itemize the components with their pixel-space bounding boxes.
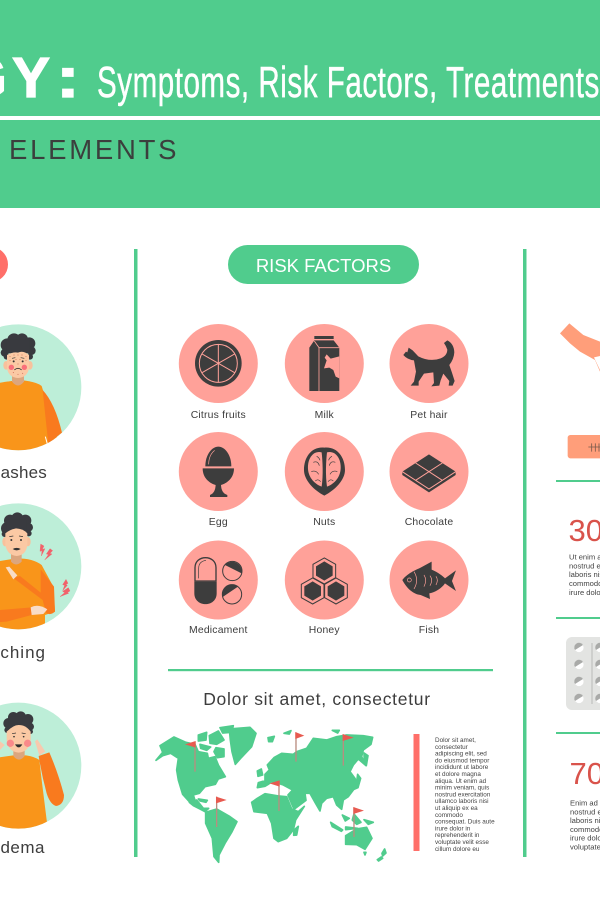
risk factor: egg: Egg <box>209 517 228 528</box>
map description text: consequat. Duis aute <box>435 819 495 826</box>
risk factor: nuts: Nuts <box>313 517 335 528</box>
risk factor: chocolate <box>390 432 468 528</box>
risk factors heading: RISK FACTORS <box>256 255 391 276</box>
map description text <box>435 737 495 853</box>
map description text: ullamco laboris nisi <box>435 798 489 805</box>
map description text: ut aliquip ex ea <box>435 805 478 812</box>
risk factor: honey <box>285 540 364 636</box>
treatment illustration: arm and bandage <box>560 323 600 458</box>
map description text: et dolore magna <box>435 771 481 778</box>
risk factor: medicament: Medicament <box>189 625 248 636</box>
elements caption: ELEMENTS <box>9 134 179 165</box>
risk factor: citrus fruits: Citrus fruits <box>191 410 246 421</box>
icon: milk carton <box>309 336 339 391</box>
world map with flags <box>156 726 386 862</box>
map description text: reprehenderit in <box>435 832 480 839</box>
rashes illustration <box>0 324 81 453</box>
main title: : <box>56 46 80 109</box>
map description text: cillum dolore eu <box>435 846 480 853</box>
map description text: incididunt ut labore <box>435 764 489 771</box>
left column divider <box>134 249 138 857</box>
flags <box>185 732 364 837</box>
icon: citrus slice <box>195 340 242 387</box>
red accent bar <box>414 734 420 851</box>
itching illustration <box>0 503 81 632</box>
risk factor: pet hair <box>390 324 468 421</box>
icon: chocolate bar <box>402 454 456 492</box>
map description text: consectetur <box>435 744 468 751</box>
risk factors heading <box>228 245 419 284</box>
risk factor: egg <box>179 432 258 528</box>
symptom: itching <box>0 503 81 662</box>
continents <box>156 726 386 862</box>
map description text: commodo <box>435 812 463 819</box>
right column divider <box>523 249 526 857</box>
map description text: minim veniam, quis <box>435 785 489 792</box>
icon: egg cup <box>203 447 234 497</box>
map description text: nostrud exercitation <box>435 791 491 798</box>
symptom: rashes <box>0 324 81 482</box>
risk factor: fish <box>390 540 468 636</box>
statistic: 70 percent <box>570 756 600 851</box>
icon: walnut <box>304 448 345 496</box>
risk factor: medicament <box>179 540 258 636</box>
icon: honeycomb <box>301 558 347 604</box>
map description text: irure dolor in <box>435 825 471 832</box>
treatment illustration: blister pack <box>566 637 600 710</box>
icon: capsule and tablets <box>194 558 242 604</box>
icon: cat <box>403 340 455 386</box>
icon: fish <box>402 562 456 599</box>
main title <box>0 46 80 110</box>
map description text: adipiscing elit, sed <box>435 751 487 758</box>
risk factor: honey: Honey <box>309 625 340 636</box>
map description text: do eiusmod tempor <box>435 757 489 764</box>
symptoms heading pill <box>0 247 8 282</box>
risk factor: chocolate: Chocolate <box>405 517 453 528</box>
map heading: Dolor sit amet, consectetur <box>203 689 431 709</box>
risk factor: nuts <box>285 432 364 528</box>
statistic: 30 percent <box>568 513 600 597</box>
map description text: voluptate velit esse <box>435 839 489 846</box>
risk factor: pet hair: Pet hair <box>410 410 448 421</box>
risk factor: fish: Fish <box>419 625 439 636</box>
header banner <box>0 0 600 208</box>
subtitle: Symptoms, Risk Factors, Treatments <box>97 57 600 106</box>
map description text: Dolor sit amet, <box>435 737 476 744</box>
risk factor: milk <box>285 324 364 421</box>
risk factor: milk: Milk <box>315 410 335 421</box>
risk factor: citrus fruits <box>179 324 258 421</box>
symptom: edema <box>0 703 81 857</box>
map description text: aliqua. Ut enim ad <box>435 778 487 785</box>
edema illustration <box>0 703 81 833</box>
